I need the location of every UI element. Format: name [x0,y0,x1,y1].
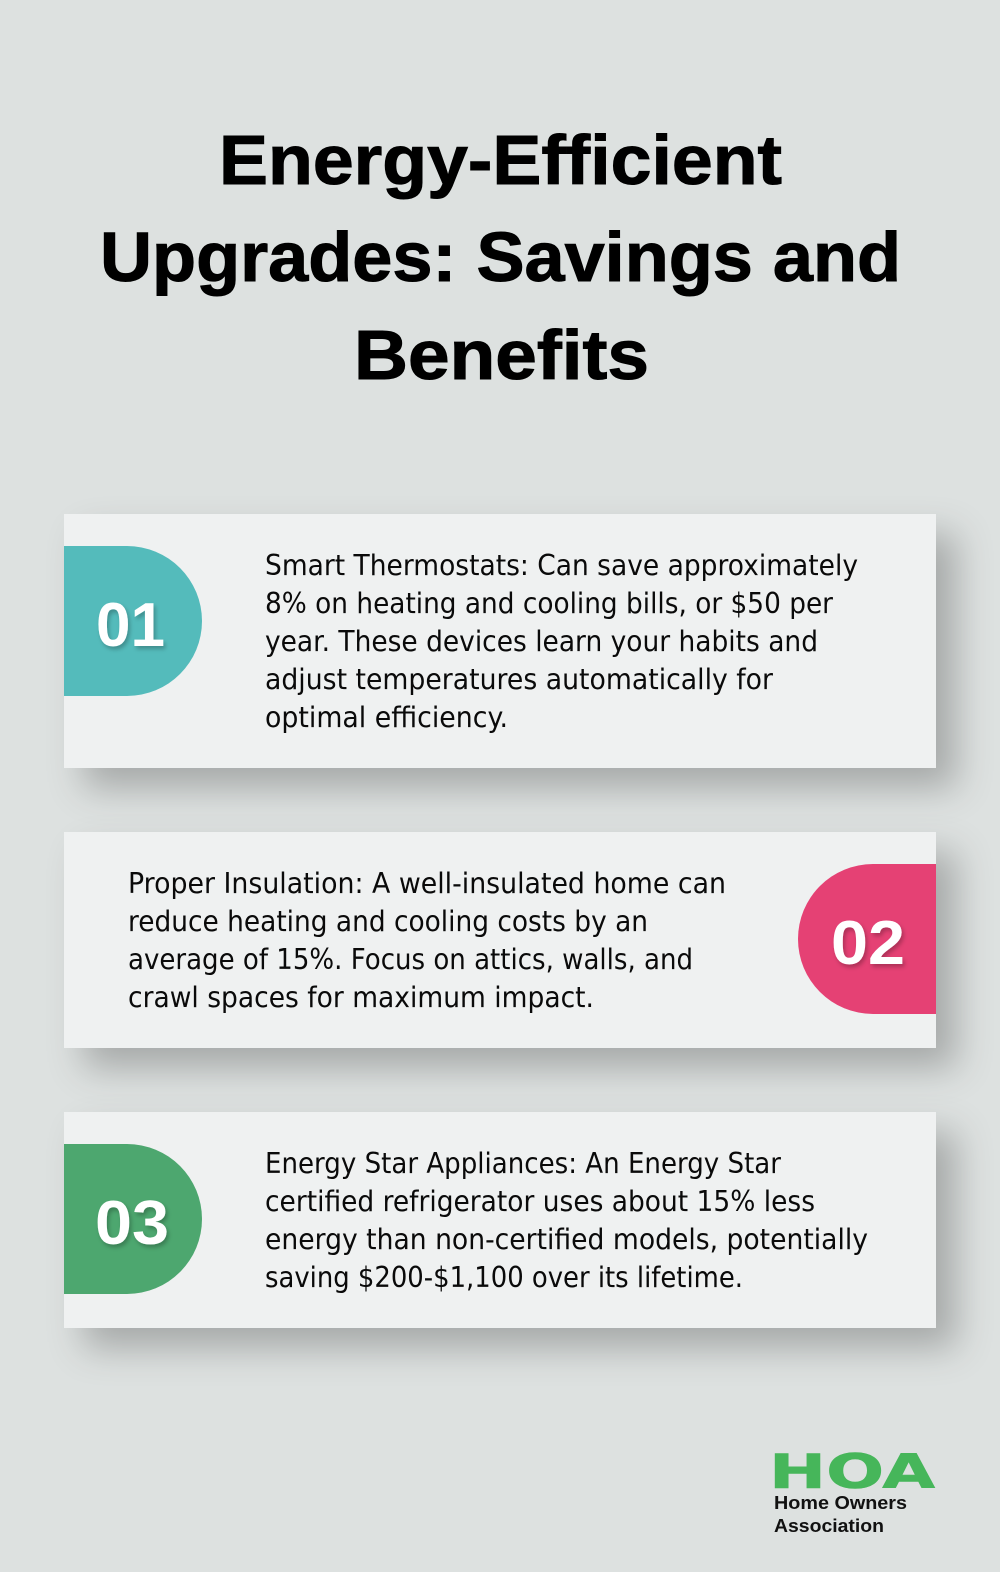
logo: Home Owners Association: Home Owners [774,1492,907,1513]
number badge 03: 03 [95,1189,169,1258]
title: Energy-Efficient [219,121,782,199]
text: energy star description [265,1146,868,1294]
title [100,121,901,394]
text: energy star description: certified refrigerator uses about 15% less [265,1184,815,1218]
text: proper insulation description: reduce heating and cooling costs by an [128,904,648,938]
text: energy star description: saving $200-$1,100 over its lifetime. [265,1260,743,1294]
title: Upgrades: Savings and [100,218,901,296]
text: smart thermostats description: adjust temperatures automatically for [265,662,773,696]
panel: proper insulation [64,832,936,1048]
logo: Home Owners Association: HOA [769,1445,936,1500]
card background 3 [64,1112,936,1328]
text: energy star description: energy than non-certified models, potentially [265,1222,868,1256]
number badge 02: 02 [831,909,905,978]
text: smart thermostats description: 8% on heating and cooling bills, or $50 per [265,586,833,620]
number badge 03 [64,1144,202,1294]
card background 1 [64,514,936,768]
card background 2 [64,832,936,1048]
text: proper insulation description: average of 15%. Focus on attics, walls, and [128,942,693,976]
number badge 01 [64,546,202,696]
title: Benefits [354,316,649,394]
text: proper insulation description: crawl spaces for maximum impact. [128,980,594,1014]
text: energy star description: Energy Star Appliances: An Energy Star [265,1146,781,1180]
text: proper insulation description: Proper Insulation: A well-insulated home can [128,866,726,900]
number badge 01: 01 [96,591,165,660]
logo: Home Owners Association [769,1445,936,1536]
text: proper insulation description [128,866,726,1014]
panel: smart thermostats [64,514,936,768]
text: smart thermostats description: year. These devices learn your habits and [265,624,818,658]
text: smart thermostats description: optimal efficiency. [265,700,508,734]
number badge 02 [798,864,936,1014]
panel: energy star appliances [64,1112,936,1328]
text: smart thermostats description [265,548,858,734]
text: smart thermostats description: Smart Thermostats: Can save approximately [265,548,858,582]
logo: Home Owners Association: Association [774,1515,884,1536]
